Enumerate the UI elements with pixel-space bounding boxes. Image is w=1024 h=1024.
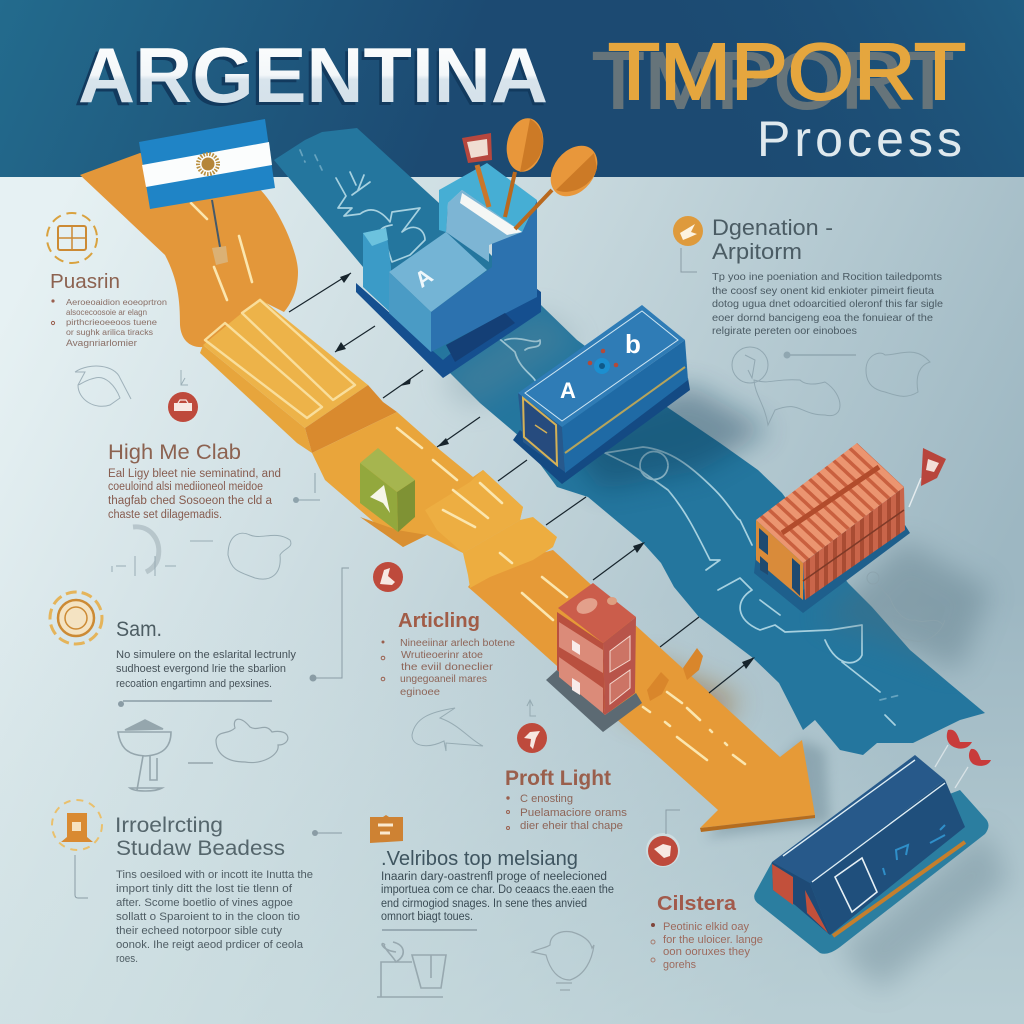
- title: Import: TMPORT: [592, 36, 954, 125]
- panel: Dgenation Arpitorm: eoer dornd bancigeng eoa the fonuiear of the: [712, 312, 933, 324]
- icon: red pennant one: [935, 730, 972, 767]
- panel: Dgenation Arpitorm: dotog ugua dnet odoarcitied oleronf this far sigle: [712, 298, 943, 310]
- panel: High Me Clab: High Me Clab: [108, 441, 241, 464]
- building door: [446, 313, 515, 362]
- panel: Cilstera: oon ooruxes they: [663, 946, 751, 958]
- building left tower: [363, 228, 391, 313]
- icon: red circle four: [646, 833, 680, 867]
- panel: Velribos top melsiang: end cirmogiod snages. In sene thes anvied: [381, 898, 587, 910]
- panel: Velribos top melsiang: omnort biagt toues.: [381, 911, 473, 923]
- hut side wall: [810, 780, 965, 935]
- terracotta container stack: [754, 443, 946, 613]
- flag of Argentina on pole: [139, 119, 275, 265]
- sketch: bowl and map below Sam: [118, 719, 288, 791]
- icon: red circle one: [166, 390, 200, 424]
- hut warehouse at route end: [754, 730, 991, 954]
- panel: High Me Clab: coeuloind alsi mediioneol meidoe: [108, 481, 263, 493]
- panel: Cilstera: Peotinic elkid oay: [663, 921, 749, 933]
- container letter b: b: [625, 329, 641, 359]
- sketch: arc and map below High Me Clab: [112, 527, 291, 579]
- panel: Dgenation Arpitorm: Tp yoo ine poeniation and Rocition tailedpomts: [712, 271, 942, 283]
- green box: [360, 448, 415, 532]
- panel: Puasrin: [47, 213, 167, 348]
- panel: Irroelrcting Studaw Beadess: their echeed notorpoor sible cuty: [116, 925, 283, 937]
- panel: Sam: Sam.: [116, 618, 162, 641]
- hut roof: [772, 755, 945, 883]
- orange road: [80, 153, 815, 832]
- panel: Dgenation Arpitorm: the coosf sey onent kid enkioter pimeirt fieuta: [712, 285, 934, 297]
- panel: Velribos top melsiang: .Velribos top melsiang: [381, 848, 578, 870]
- panel: Articling: [381, 610, 515, 698]
- orange tokens on road: [647, 648, 703, 701]
- icon: red sign marker: [462, 133, 492, 207]
- icon: red circle three: [517, 723, 547, 753]
- title: Argentina: ARGENTINA: [74, 34, 546, 122]
- subtitle: Process: Process: [757, 111, 962, 167]
- icon: orange tag badge: [370, 815, 403, 843]
- panel: Velribos top melsiang: importuea com ce char. Do ceaacs the.eaen the: [381, 884, 614, 896]
- panel: High Me Clab: thagfab ched Sosoeon the cld a: [108, 495, 273, 507]
- panel: Articling: ungegoaneil mares: [400, 674, 487, 685]
- road: start curve: [80, 153, 298, 347]
- panel: Proft Light: Puelamaciore orams: [520, 807, 628, 819]
- panel: Proft Light: Proft Light: [505, 767, 611, 790]
- road: arrow lower section: [468, 550, 815, 832]
- bullet list: [51, 298, 167, 348]
- panel: Irroelrcting Studaw Beadess: Studaw Beadess: [116, 837, 285, 860]
- panel: Cilstera: Cilstera: [657, 893, 737, 915]
- icon: red circle two: [373, 562, 403, 592]
- panel: Dgenation Arpitorm: Dgenation -: [712, 215, 833, 240]
- icon: gold sun seal: [50, 592, 102, 644]
- connector: Cilstera: [666, 810, 680, 834]
- panel: Cilstera: [651, 893, 763, 971]
- panel: Articling: the eviil doneclier: [401, 662, 494, 673]
- building front block: A: [410, 263, 437, 293]
- panel: Articling: Nineeiinar arlech botene: [400, 638, 515, 649]
- panel: Velribos top melsiang: [381, 848, 614, 930]
- building base: [356, 283, 541, 378]
- panel: Irroelrcting Studaw Beadess: oonok. Ihe reigt aeod prdicer of ceola: [116, 939, 304, 951]
- panel: Cilstera: gorehs: [663, 959, 696, 971]
- connector: High Me Clab: [293, 473, 320, 503]
- panel: Sam: sudhoest evergond lrie the sbarlion: [116, 663, 286, 675]
- soft shadows: [440, 310, 1010, 990]
- panel: Irroelrcting Studaw Beadess: [52, 800, 313, 965]
- panel: Sam: [50, 592, 296, 690]
- river route: [274, 128, 985, 755]
- header band: [0, 0, 1024, 177]
- panel: Irroelrcting Studaw Beadess: after. Scome boetlio of vines agpoe: [116, 897, 293, 909]
- sketch: outline near Puasrin: [75, 366, 188, 406]
- panel: Articling: Articling: [398, 610, 480, 632]
- bullet list: Aeroeoaidion eoeoprtron: [66, 298, 167, 307]
- blue shipping container: [513, 305, 690, 484]
- red crate on pallet: [546, 583, 642, 732]
- bullet list: or sughk arilica tiracks: [66, 328, 153, 337]
- road: middle section: [312, 412, 557, 588]
- panel: Irroelrcting Studaw Beadess: import tinly ditt the lost tie tlenn of: [116, 883, 293, 895]
- building with darts: [356, 115, 607, 378]
- bullet list: alsocecoosoie ar elagn: [66, 308, 147, 317]
- building front block: [389, 232, 487, 352]
- icon: dart two: [515, 137, 607, 229]
- panel: Sam: No simulere on the eslarital lectrunly: [116, 649, 296, 661]
- panel: Velribos top melsiang: Inaarin dary-oastrenfl proge of neelecioned: [381, 871, 607, 883]
- panel: Proft Light: [505, 767, 628, 832]
- title: Argentina: ARGENTINA: [78, 31, 548, 119]
- icon: red pennant two: [955, 749, 991, 788]
- bullet list: pirthcrieoeeoos tuene: [66, 318, 158, 327]
- icon: gold hat badge: [52, 800, 102, 850]
- hut front: [772, 862, 830, 935]
- sketch: globe and maps below Dgenation: [732, 347, 930, 425]
- connector: Irroelrcting: [75, 830, 342, 898]
- panel: High Me Clab: [108, 441, 281, 521]
- sketch: animal outline right of river: [867, 572, 945, 641]
- sketch: whale outline below Articling: [412, 700, 536, 751]
- icon: dart one: [503, 115, 547, 217]
- panel: Articling: Wrutieoerinr atoe: [401, 650, 483, 661]
- panel: High Me Clab: Eal Ligy bleet nie seminatind, and: [108, 468, 281, 480]
- panel: Irroelrcting Studaw Beadess: roes.: [116, 953, 138, 965]
- connector: Sam: [118, 568, 349, 707]
- panel: Sam: recoation engartimn and pexsines.: [116, 678, 272, 690]
- hut base: [754, 790, 988, 954]
- container letter A: A: [560, 378, 576, 403]
- panel: Dgenation Arpitorm: relgirate pereten oor einoboes: [712, 325, 857, 337]
- panel: Irroelrcting Studaw Beadess: Irroelrcting: [115, 814, 223, 837]
- building right face: [431, 200, 537, 352]
- panel: Puasrin: Puasrin: [50, 271, 120, 293]
- connector arrows between routes: [289, 273, 755, 693]
- road: plank section: [200, 298, 397, 453]
- road: lane markings: [191, 203, 745, 764]
- panel: Irroelrcting Studaw Beadess: Tins oesiloed with or incott ite Inutta the: [116, 869, 313, 881]
- panel: High Me Clab: chaste set dilagemadis.: [108, 509, 222, 521]
- icon: orange plane circle: [673, 216, 703, 246]
- icon: gold sun badge: [47, 213, 97, 263]
- box letter: [370, 485, 390, 513]
- panel: Proft Light: dier eheir thal chape: [520, 820, 623, 832]
- icon: blue asterisk emblem: [588, 349, 618, 374]
- hut wall lettering: [883, 825, 945, 875]
- panel: Articling: eginoee: [400, 687, 440, 698]
- sketch: scale and bird below Velribos: [377, 932, 594, 997]
- bullet list: Avagnriarlomier: [66, 338, 137, 348]
- panel: Dgenation Arpitorm: [673, 215, 943, 337]
- hut door: [835, 858, 877, 912]
- icon: sun of May: [198, 154, 218, 174]
- panel: Dgenation Arpitorm: Arpitorm: [712, 239, 802, 264]
- building rear roof: [439, 163, 537, 262]
- panel: Proft Light: C enosting: [520, 793, 573, 805]
- icon: red map pin flag: [909, 448, 946, 507]
- title: Import: TMPORT: [608, 27, 966, 116]
- river chalk sketches: [300, 150, 900, 725]
- panel: Irroelrcting Studaw Beadess: sollatt o Sparoient to in the cloon tio: [116, 911, 300, 923]
- panel: Cilstera: for the uloicer. lange: [663, 934, 763, 946]
